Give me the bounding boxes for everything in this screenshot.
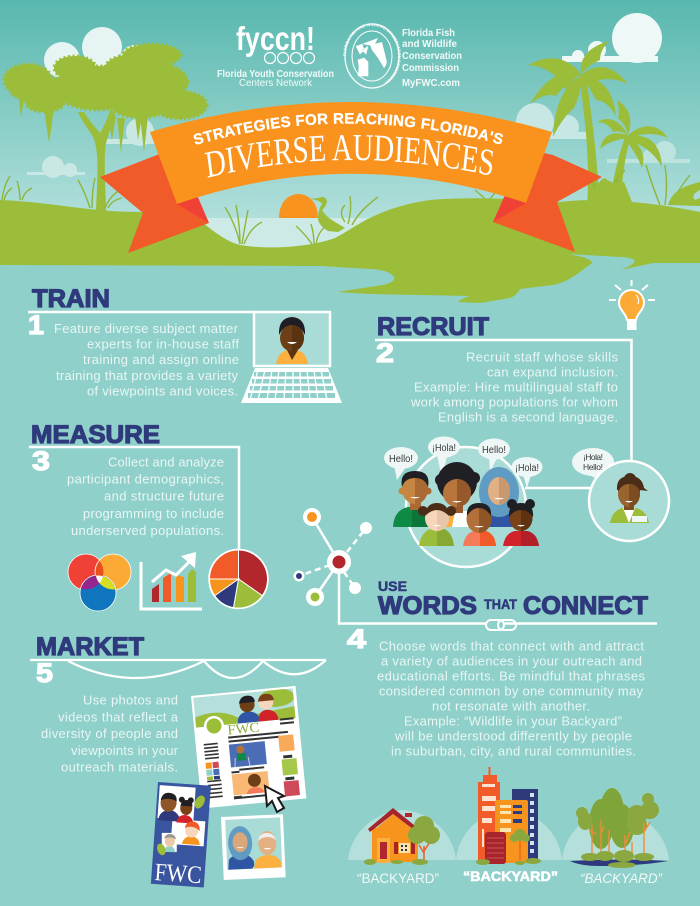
ribbon tails — [100, 150, 602, 253]
swamp tree — [4, 44, 207, 212]
commission name — [402, 28, 462, 89]
body text: of viewpoints and voices. — [87, 384, 238, 398]
number: 1 — [28, 310, 44, 340]
number: 4 — [347, 624, 366, 654]
body text — [410, 350, 618, 424]
backyard labels: “BACKYARD” — [463, 868, 558, 884]
section 2: recruit — [375, 280, 669, 567]
rule — [339, 570, 657, 624]
body text: Use photos and — [83, 692, 178, 708]
body text: participant demographics, — [67, 472, 224, 486]
body text: training that provides a variety — [56, 368, 238, 383]
person: girl in red — [503, 499, 539, 546]
sun — [279, 194, 318, 218]
heading: THAT — [484, 596, 517, 612]
body text: work among populations for whom — [410, 394, 618, 410]
heading: MARKET — [36, 633, 144, 661]
speech text: Hello! — [583, 462, 603, 472]
clouds — [27, 13, 690, 178]
header scene — [0, 0, 700, 303]
speech text: ¡Hola! — [583, 452, 603, 462]
person: woman in hijab — [479, 467, 519, 527]
person: woman with curly hair — [435, 462, 480, 527]
speech text: Hello! — [389, 454, 413, 465]
body text: Choose words that connect with and attract — [379, 638, 644, 654]
section 4: words that connect — [339, 570, 669, 886]
icon: chain link — [486, 620, 516, 630]
rule — [29, 447, 239, 550]
commission name: and Wildlife — [402, 39, 457, 50]
icon: bar chart — [141, 552, 202, 609]
person: man in green — [393, 471, 432, 527]
body text: considered common by one community may — [379, 684, 644, 698]
sky — [0, 0, 700, 235]
network name: Florida Youth Conservation — [217, 68, 334, 80]
body text: can expand inclusion. — [487, 364, 618, 380]
body text — [54, 321, 239, 398]
title banner — [100, 102, 602, 253]
photo print — [221, 814, 286, 880]
brochure: FWC — [154, 859, 203, 889]
body text: outreach materials. — [61, 760, 178, 774]
speech bubbles — [384, 436, 614, 488]
commission name: MyFWC.com — [402, 78, 460, 89]
brochure — [151, 782, 211, 889]
ground — [0, 198, 700, 303]
speech text: ¡Hola! — [515, 463, 539, 474]
icon: light bulb — [609, 280, 655, 330]
body text: viewpoints in your — [71, 743, 179, 758]
bushes at right — [590, 178, 700, 206]
emblem row — [264, 52, 314, 64]
icon: pie chart — [209, 550, 268, 608]
body text: Recruit staff whose skills — [466, 350, 618, 364]
heading: TRAIN — [32, 285, 110, 313]
seal: FLORIDA FISH AND WILDLIFE CONSERVATION COMMISSION — [343, 23, 401, 84]
body text: underserved populations. — [71, 523, 224, 538]
icon: venn diagram — [68, 554, 131, 611]
icon: mouse cursor — [265, 786, 284, 812]
commission name: Conservation — [402, 51, 462, 62]
body text: and structure future — [104, 488, 224, 504]
body text: experts for in-house staff — [87, 336, 239, 352]
heading: USE — [378, 578, 407, 594]
rule — [375, 340, 632, 488]
commission name: Commission — [402, 63, 459, 74]
speech text: Hello! — [482, 445, 506, 456]
number: 2 — [376, 338, 394, 368]
backyard labels: “BACKYARD” — [580, 870, 663, 886]
group of diverse people — [393, 462, 539, 546]
rule with scallops — [30, 660, 326, 678]
body text: English is a second language. — [438, 410, 618, 424]
body text: programming to include — [83, 506, 224, 521]
icon: rural forest — [570, 788, 668, 868]
body text: Example: “Wildlife in your Backyard” — [404, 714, 622, 728]
body text: Collect and analyze — [108, 454, 224, 470]
body text: videos that reflect a — [58, 710, 179, 724]
heading: WORDS — [378, 592, 477, 620]
body text: training and assign online — [83, 352, 239, 367]
body text: diversity of people and — [41, 726, 178, 741]
body text: educational efforts. Be mindful that phrases — [377, 668, 646, 684]
heron — [310, 197, 345, 232]
person: girl with pigtails — [418, 503, 456, 546]
icon: laptop with presenter — [241, 312, 342, 403]
body text — [377, 638, 646, 758]
body text: a variety of audiences in your outreach and — [381, 654, 642, 668]
palm trees — [528, 41, 668, 205]
hills behind icons — [348, 810, 669, 860]
wordmark: fyccn! — [236, 20, 315, 57]
backyard labels: “BACKYARD” — [357, 870, 439, 886]
section 5: market — [30, 633, 326, 889]
body text — [67, 454, 224, 538]
web page mock-up: FWC — [227, 721, 260, 739]
body text: will be understood differently by people — [394, 728, 632, 744]
speech text: ¡Hola! — [432, 443, 456, 454]
grass tufts — [2, 165, 690, 244]
title line 1: STRATEGIES FOR REACHING FLORIDA'S — [194, 113, 504, 144]
logo: FWC — [343, 23, 462, 89]
icon: city buildings — [476, 767, 541, 865]
body text: Feature diverse subject matter — [54, 321, 239, 336]
icon: network connector — [294, 508, 372, 606]
logo: fyccn: Centers Network — [239, 78, 313, 89]
backyard labels — [357, 868, 663, 886]
section 3: measure — [29, 421, 268, 611]
title line 2: DIVERSE AUDIENCES — [204, 135, 493, 178]
logo: fyccn — [217, 20, 334, 89]
heading: RECRUIT — [377, 313, 489, 341]
staff member circle — [589, 461, 669, 541]
speech text — [389, 443, 603, 474]
lake — [205, 218, 375, 250]
web page mock-up — [191, 686, 306, 808]
body text: Example: Hire multilingual staff to — [414, 380, 618, 394]
heading: MEASURE — [31, 421, 160, 449]
person: boy in orange — [463, 503, 496, 546]
rule — [28, 311, 254, 313]
body text — [41, 692, 179, 774]
commission name: Florida Fish — [402, 28, 455, 39]
number: 3 — [32, 446, 50, 476]
icon: suburban house — [364, 808, 440, 865]
body text: not resonate with another. — [432, 698, 590, 714]
number: 5 — [36, 658, 53, 688]
body text: in suburban, city, and rural communities. — [391, 744, 636, 758]
heading — [378, 578, 648, 620]
community circle — [406, 447, 526, 567]
section 1: train — [28, 285, 342, 403]
heading: CONNECT — [523, 592, 648, 620]
ribbon body — [150, 102, 552, 204]
